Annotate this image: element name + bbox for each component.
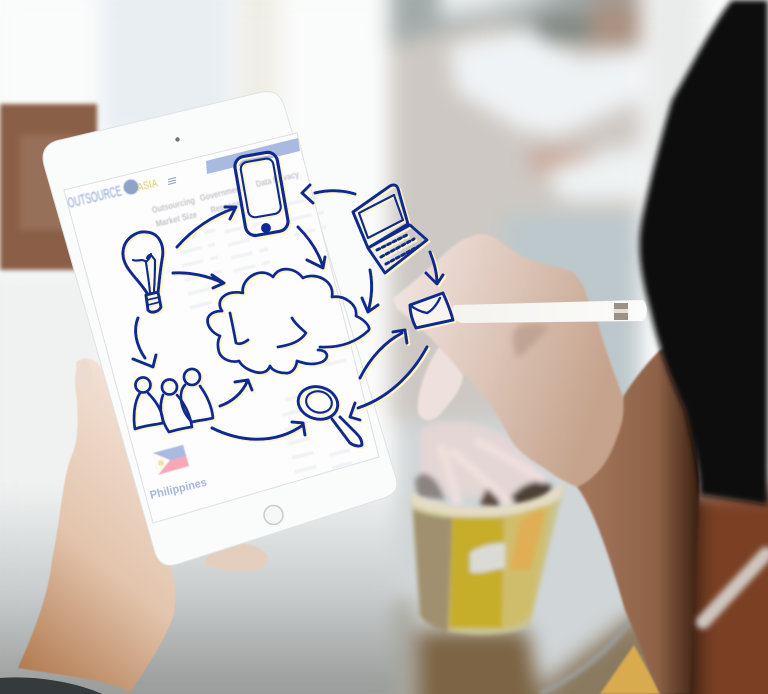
site logo: OUTSOURCE — [66, 183, 123, 212]
tablet body — [43, 92, 397, 565]
column headings: Market Size — [155, 209, 198, 229]
mug — [411, 482, 565, 635]
table rim and floor — [540, 618, 661, 694]
column headings: Government — [199, 183, 244, 203]
icon: light bulb — [123, 232, 163, 312]
right hand holding pen — [393, 234, 624, 487]
column headings: Outsourcing — [151, 195, 196, 215]
watch strap — [0, 677, 102, 694]
arrows between icons — [133, 185, 443, 439]
menu icon — [168, 178, 176, 184]
column headings — [151, 169, 300, 229]
shirt strap — [703, 554, 766, 622]
hair — [640, 0, 768, 505]
left hand holding tablet — [18, 358, 268, 692]
faint body text columns — [176, 197, 355, 472]
icon: smartphone — [233, 151, 290, 237]
person: arm, hair and strap — [577, 0, 768, 694]
brown furniture block — [0, 104, 97, 270]
Philippines label: Philippines — [149, 477, 208, 502]
flow sketch — [123, 151, 453, 446]
icon: magnifying glass — [295, 382, 362, 446]
column headings: Data Privacy — [255, 169, 300, 189]
tablet camera — [175, 137, 180, 142]
tablet screen — [64, 133, 379, 523]
icon: laptop — [353, 185, 427, 273]
plant in mug — [415, 422, 552, 508]
icon: cloud — [208, 269, 369, 373]
site logo: ASIA — [136, 177, 159, 194]
Philippines flag — [153, 445, 189, 475]
column headings: Response — [210, 197, 245, 215]
icon: envelope — [410, 293, 453, 328]
stylus pen — [451, 300, 647, 323]
header bar — [206, 138, 300, 174]
icon: three people — [134, 369, 213, 432]
tablet home button — [264, 506, 283, 524]
